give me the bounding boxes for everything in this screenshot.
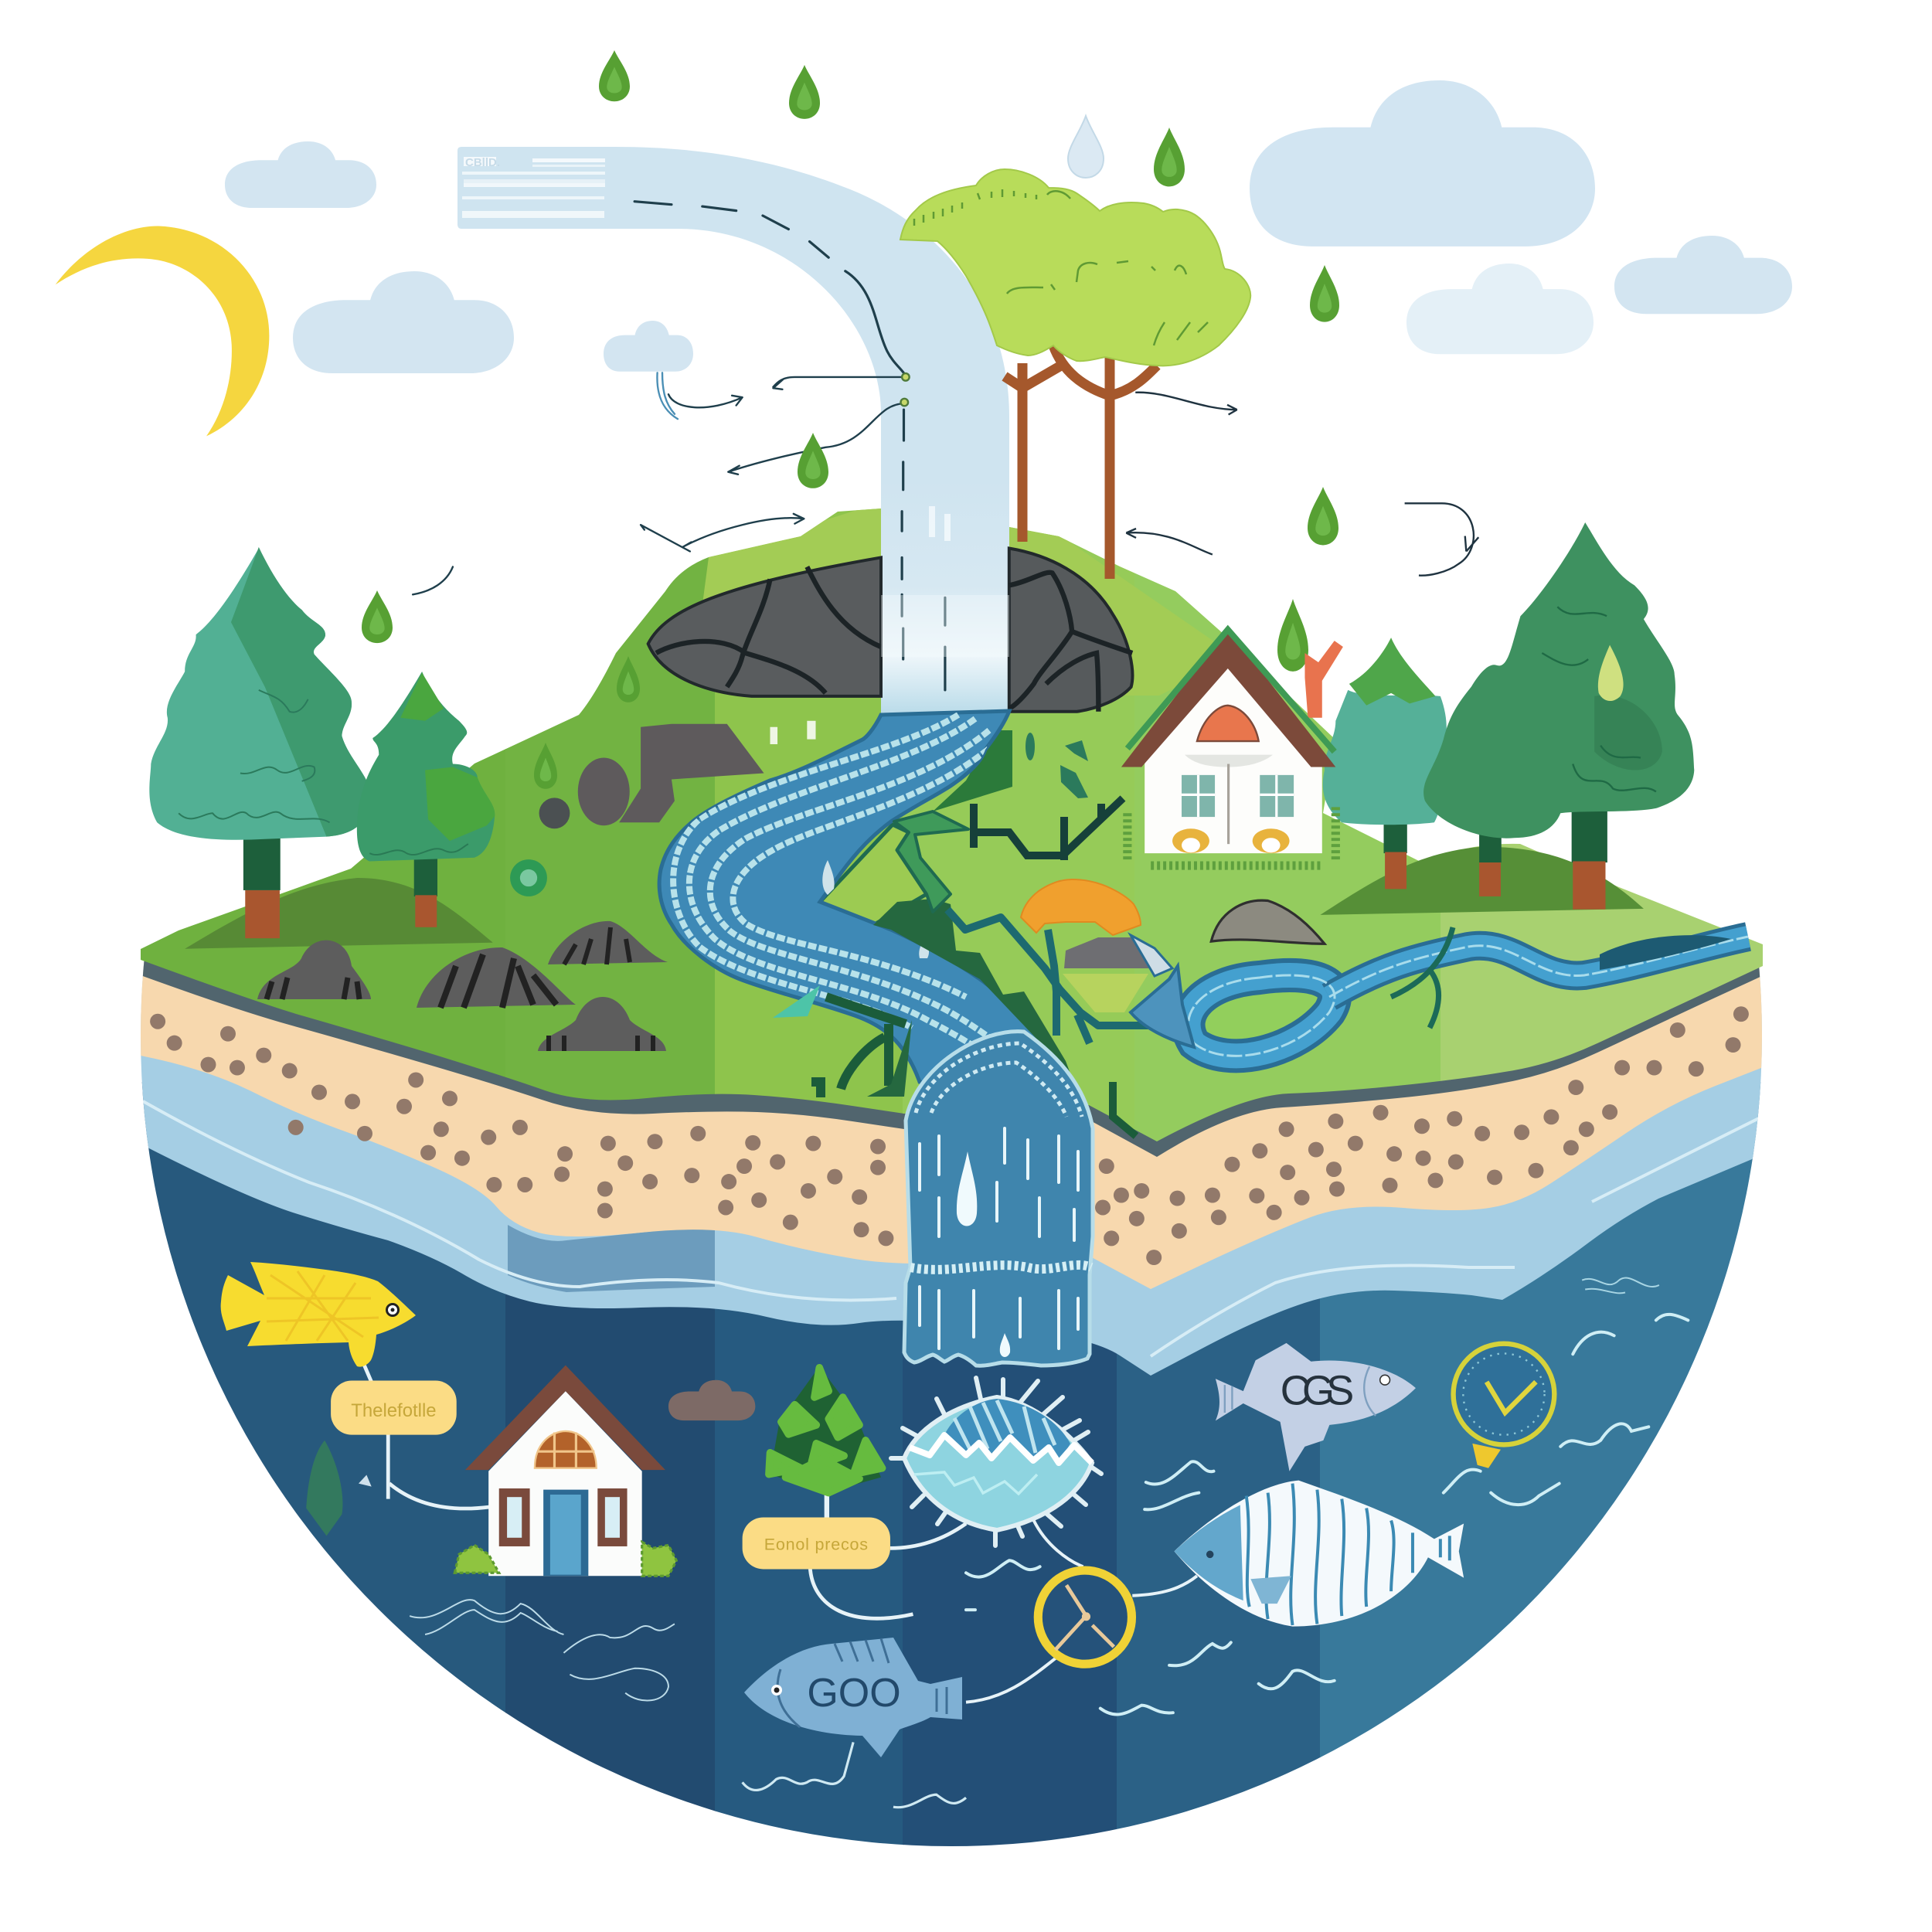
label: fish: Thelefotlle	[351, 1400, 437, 1421]
drop 5	[1154, 128, 1185, 186]
drop 4	[362, 590, 393, 643]
river tail fan	[1131, 966, 1194, 1047]
foreground rocks left	[257, 921, 668, 1051]
brown cloud	[668, 1380, 755, 1420]
cloud: small centre	[604, 321, 693, 372]
aquifer highlight lines	[143, 1101, 1770, 1356]
drop: pale water	[1068, 116, 1104, 178]
yellow clock badge	[1454, 1344, 1554, 1468]
rock right of fan	[1211, 900, 1325, 944]
aquifer darker panel	[508, 1225, 715, 1292]
drop 1	[599, 50, 630, 101]
cloud: upper left	[225, 141, 376, 208]
label: fir tree: Eonol precos	[764, 1536, 869, 1554]
rock cave left	[648, 557, 881, 696]
blue fish	[744, 1638, 962, 1757]
drop 6	[1310, 265, 1339, 322]
lower waterfall block	[904, 1032, 1093, 1366]
orange windmill behind house	[1304, 641, 1343, 718]
spiky urchin	[891, 1378, 1101, 1546]
waterfall spray over the rocks	[881, 506, 1009, 657]
flower pots	[1172, 828, 1290, 853]
mid-slope grey rocks	[510, 721, 815, 896]
right window	[1260, 775, 1294, 817]
cloud: far right	[1614, 236, 1792, 314]
grey fish	[1216, 1343, 1416, 1471]
aquifer light blue layer	[116, 954, 1801, 1376]
farm house	[1121, 628, 1335, 866]
lower-left roots and fin	[773, 985, 1136, 1136]
fish label text: GOO	[807, 1671, 901, 1716]
tree trunks: right group	[1384, 807, 1607, 910]
lawn bushes	[1128, 807, 1335, 866]
ocean strips	[131, 1082, 1799, 1870]
teal tree	[1323, 638, 1447, 825]
dark branch root	[974, 798, 1123, 860]
sand layer	[116, 954, 1801, 1289]
ocean contents: right quadrant	[966, 1278, 1688, 1714]
drop 8	[1277, 599, 1308, 672]
hill highlight	[696, 502, 1236, 696]
teal roots	[947, 910, 1157, 1043]
waterfall channel from banner	[457, 147, 1009, 715]
green zigzag ridge	[894, 811, 968, 912]
pine tree: big left	[149, 547, 371, 938]
tiny water drops on the river	[822, 860, 929, 958]
cloud: large upper right	[1250, 80, 1595, 247]
river main	[657, 709, 1037, 1083]
banner text block	[462, 156, 605, 218]
grey soil band	[116, 954, 1801, 1157]
wave lines	[966, 1315, 1688, 1714]
cloud: left	[293, 271, 514, 373]
small meadow marks right of river	[1026, 733, 1088, 798]
underwater house	[454, 1366, 676, 1576]
drop 7	[1308, 487, 1338, 545]
cloud: pale right	[1406, 264, 1594, 354]
fish label text: CGS	[1281, 1368, 1354, 1414]
rock under fan	[1064, 937, 1151, 968]
tree: top canopy	[900, 169, 1250, 366]
green land surface	[141, 509, 1763, 1141]
green fir tree	[769, 1366, 883, 1517]
dashed flow line and annotation arrows	[413, 202, 945, 690]
pine tree: small left	[357, 672, 495, 927]
dark green bank along river	[873, 899, 1086, 1115]
orange fan shell	[1021, 879, 1141, 935]
drop 3	[798, 433, 828, 488]
rock cave right	[1009, 549, 1132, 712]
tree: top canopy trunks	[1005, 345, 1157, 579]
drop 10	[534, 743, 557, 789]
pale wedge by the river	[1131, 935, 1172, 976]
ocean contents: left quadrant	[306, 1363, 966, 1808]
left window	[1182, 775, 1215, 817]
attic window	[1197, 706, 1259, 741]
yellow fish	[221, 1262, 416, 1367]
moon	[56, 226, 269, 436]
label: fish	[331, 1381, 457, 1435]
label: fir tree	[743, 1517, 890, 1569]
wave lines	[410, 1600, 675, 1701]
arrows right of waterfall	[1126, 393, 1478, 576]
banner text block: CBllD.	[465, 156, 500, 169]
small shark fin	[359, 1475, 372, 1487]
right river loop	[1189, 927, 1748, 1056]
connectors	[363, 1363, 966, 1618]
dark hills under trees	[185, 847, 1644, 949]
striped fish	[1174, 1481, 1464, 1627]
clock ring	[1038, 1570, 1131, 1664]
pebbles right	[1103, 1014, 1741, 1257]
umbrella pole	[1185, 755, 1273, 767]
sky: clouds	[225, 80, 1792, 373]
drop 9	[617, 656, 640, 702]
drop 2	[789, 65, 820, 119]
drops	[362, 50, 1339, 789]
land and ocean cross-section disc	[116, 954, 1801, 1870]
small faded tree	[306, 1440, 342, 1536]
connectors	[966, 1520, 1197, 1702]
pine tree: big right	[1423, 522, 1694, 838]
house roof	[1121, 628, 1335, 767]
upper dark-green bank beside river	[933, 730, 1012, 811]
inner-bend green diamond	[820, 825, 927, 925]
patch of grass under rock	[1063, 974, 1148, 1012]
pebbles left	[158, 1022, 886, 1238]
house wall	[1145, 662, 1322, 853]
